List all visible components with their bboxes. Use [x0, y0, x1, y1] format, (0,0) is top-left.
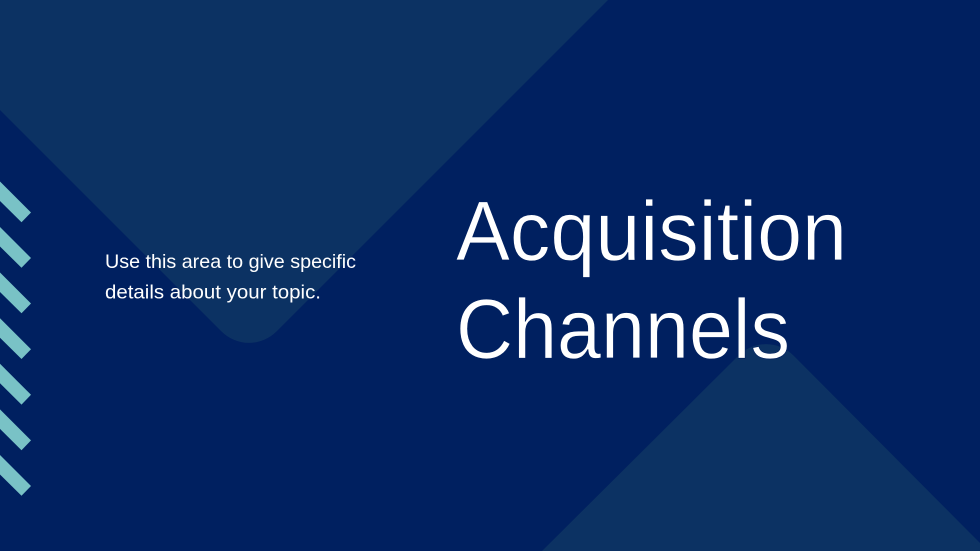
title: Acquisition	[456, 184, 847, 278]
bottom rounded triangle shape	[542, 344, 980, 551]
top rounded triangle shape	[0, 0, 608, 343]
body text	[105, 251, 356, 304]
body text: details about your topic.	[105, 282, 321, 304]
body text: Use this area to give specific	[105, 251, 356, 273]
title: Channels	[456, 282, 790, 376]
icon: diagonal teal stripes	[0, 182, 31, 496]
title	[456, 184, 847, 376]
